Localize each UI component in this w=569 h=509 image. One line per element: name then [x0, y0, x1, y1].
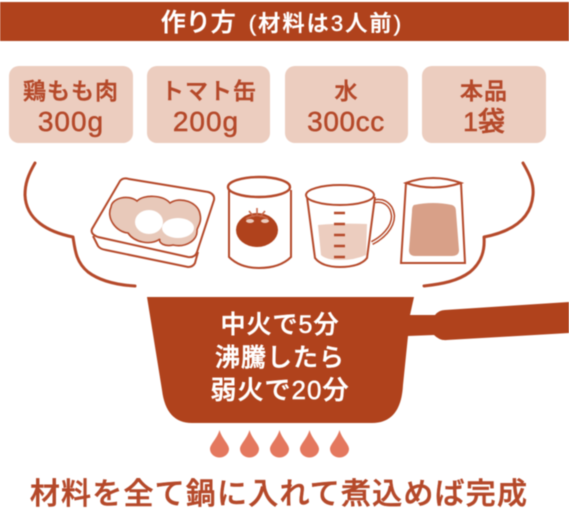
tomato: [236, 213, 278, 247]
ingredient card: water: 300cc: [307, 106, 385, 137]
ingredient card: roux: [422, 66, 546, 143]
ingredient card: roux: 1袋: [463, 107, 505, 137]
header title: 作り方 (材料は3人前): [161, 9, 403, 37]
chicken pieces: [110, 196, 201, 246]
ingredient card: chicken: 300g: [38, 106, 104, 137]
saucepan: 弱火で20分: [211, 375, 349, 405]
ingredient card: water: 水: [334, 78, 358, 104]
ingredient card: canned tomato: 200g: [173, 106, 239, 137]
icon: chicken tray: [92, 178, 214, 267]
water: [318, 224, 367, 260]
icon: measuring cup: [306, 185, 393, 267]
left bracket curve: [25, 163, 135, 286]
saucepan: [147, 297, 569, 423]
pan instructions: 中火で5分: [221, 311, 339, 339]
ingredient card: chicken: 鶏もも肉: [23, 78, 119, 104]
header band: [0, 2, 569, 41]
icon: product pouch: [401, 178, 465, 263]
ingredient card: roux: 本品: [460, 78, 508, 104]
ingredient card: chicken: [9, 66, 133, 143]
ingredient card: canned tomato: [147, 66, 270, 143]
icon: tomato can: [228, 177, 291, 268]
flame drops: [210, 430, 349, 458]
ingredient card: canned tomato: トマト缶: [161, 78, 257, 104]
saucepan: 沸騰したら: [215, 344, 345, 372]
right bracket curve: [424, 163, 533, 286]
ingredient card: water: [285, 66, 408, 143]
